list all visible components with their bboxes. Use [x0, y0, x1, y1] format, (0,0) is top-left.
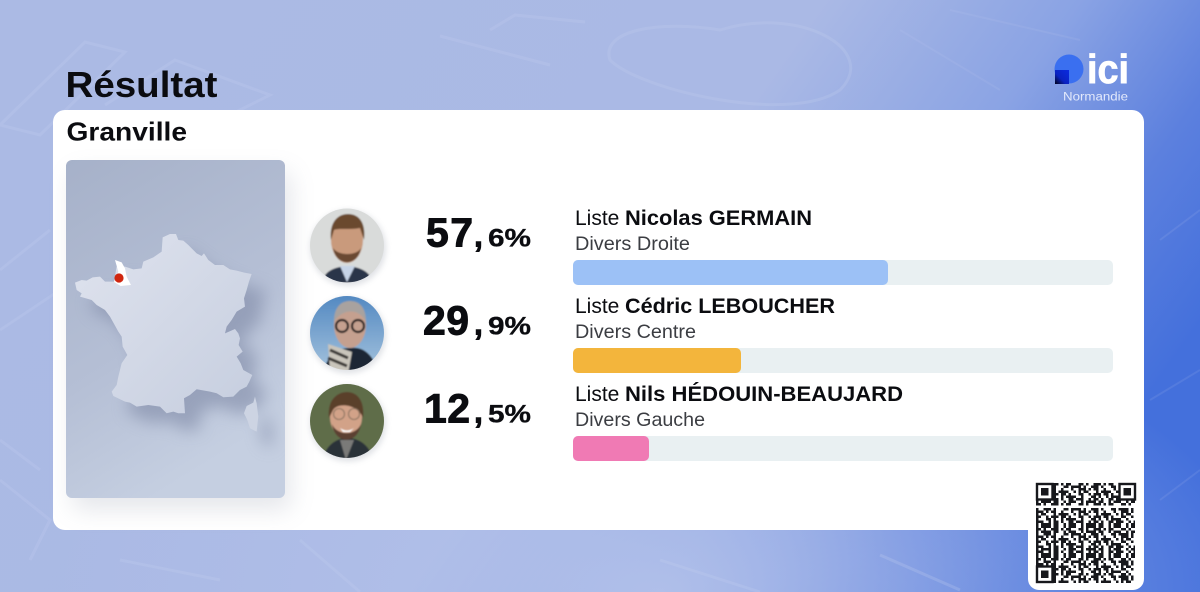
value: 57,6%: , — [474, 218, 483, 254]
label: Cédric LEBOUCHER — [575, 295, 835, 343]
heading: Granville: Granville — [66, 116, 187, 146]
label: Nils HÉDOUIN-BEAUJARD — [575, 383, 903, 431]
value: 57,6%: 57 — [426, 210, 473, 256]
row: Nicolas GERMAIN — [305, 204, 1113, 288]
Corsica — [244, 397, 258, 432]
map shadow — [90, 251, 272, 448]
value: 29,9%: 29 — [423, 298, 469, 344]
label: Nicolas GERMAIN: Nicolas GERMAIN — [625, 207, 812, 230]
label: Cédric LEBOUCHER: Liste — [575, 295, 619, 318]
logo: ici Normandie — [1054, 46, 1129, 104]
label: Nicolas GERMAIN — [575, 207, 812, 255]
logo: ici Normandie: ici — [1087, 46, 1129, 92]
value: 12,5%: 12 — [424, 386, 470, 432]
portrait: Nils Hédouin-Beaujard — [310, 384, 384, 458]
value: 57,6%: 6% — [488, 224, 531, 252]
value: 29,9% — [423, 298, 531, 344]
label: Nicolas GERMAIN: Divers Droite — [575, 233, 690, 255]
panel: France map — [66, 160, 285, 498]
row: Cédric LEBOUCHER — [305, 292, 1113, 376]
value: 29,9%: 9% — [488, 312, 531, 340]
logo: ici Normandie: Normandie — [1063, 92, 1128, 104]
value: 12,5%: 5% — [488, 400, 531, 428]
bar: 57.6% — [573, 260, 1113, 285]
bar: 29.9% — [573, 348, 1113, 373]
department: Manche — [114, 260, 131, 286]
marker: Granville — [114, 273, 124, 283]
bar: 12.5% — [573, 436, 1113, 461]
panel shadow — [72, 172, 291, 510]
results card — [53, 110, 1144, 530]
row: Nils HÉDOUIN-BEAUJARD — [305, 380, 1113, 464]
label: Cédric LEBOUCHER: Cédric LEBOUCHER — [625, 295, 835, 318]
label: Nils HÉDOUIN-BEAUJARD: Nils HÉDOUIN-BEAUJARD — [625, 383, 903, 406]
title: Résultat — [66, 64, 218, 105]
value: 57,6% — [426, 210, 531, 256]
value: 12,5% — [424, 386, 531, 432]
portrait: Cédric Leboucher — [310, 296, 384, 370]
value: 12,5%: , — [474, 394, 483, 430]
label: Nils HÉDOUIN-BEAUJARD: Divers Gauche — [575, 409, 705, 431]
France outline — [75, 234, 258, 432]
QR code — [1028, 484, 1144, 590]
portrait: Nicolas Germain — [310, 208, 384, 282]
label: Nils HÉDOUIN-BEAUJARD: Liste — [575, 383, 619, 406]
value: 29,9%: , — [474, 306, 483, 342]
label: Cédric LEBOUCHER: Divers Centre — [575, 321, 696, 343]
label: Nicolas GERMAIN: Liste — [575, 207, 619, 230]
